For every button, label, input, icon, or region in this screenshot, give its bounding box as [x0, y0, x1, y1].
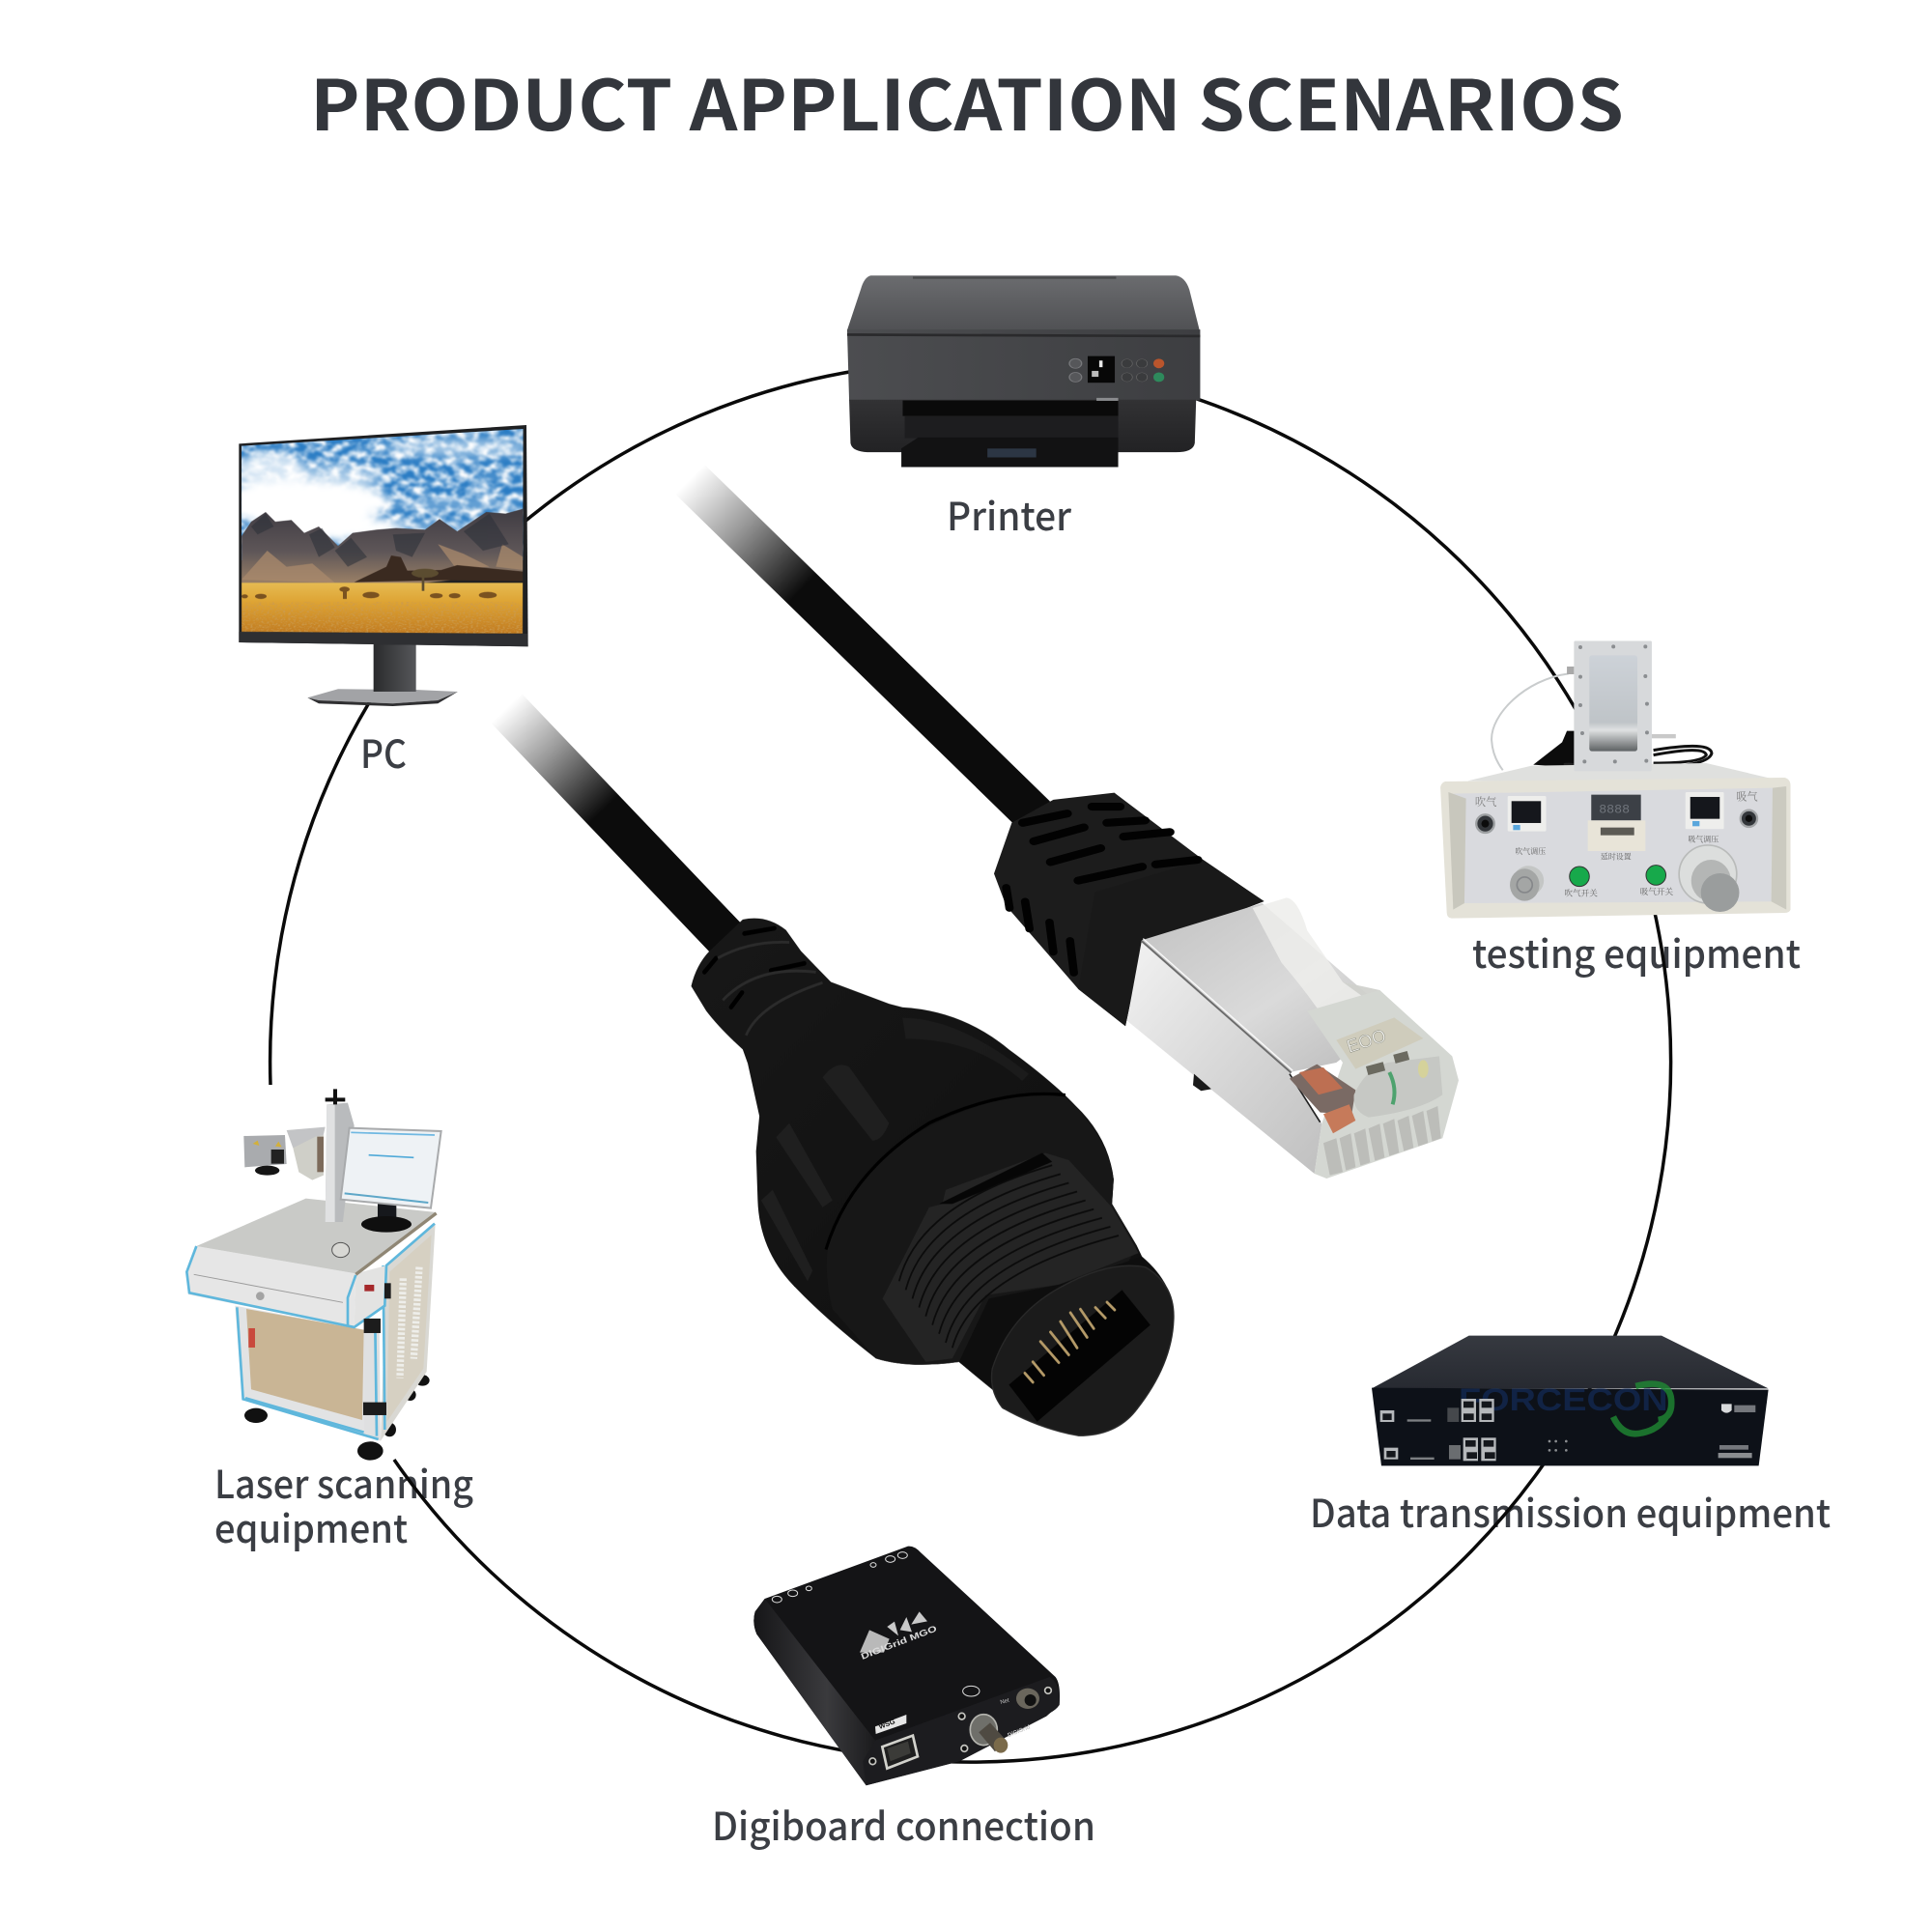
equipment top [1372, 1336, 1769, 1388]
control panel: 吹气开关 [1564, 887, 1598, 898]
socket body [691, 918, 1174, 1435]
socket thread [883, 1153, 1139, 1362]
label: Data transmission equipment: Data transmission equipment [1310, 1483, 1831, 1539]
equipment ports [1380, 1399, 1568, 1461]
contact teeth [1323, 1106, 1441, 1176]
control panel: 延时设置 [1601, 851, 1632, 862]
equipment front [1372, 1388, 1769, 1465]
digiboard logo: DIGIGrid MGO [860, 1624, 938, 1662]
machine monitor [341, 1128, 441, 1233]
icon: laser scanning machine [186, 1089, 441, 1461]
icon: PC monitor [210, 425, 531, 706]
printer tray [901, 438, 1119, 467]
icon: testing equipment [1440, 640, 1791, 919]
label: PC: PC [360, 724, 407, 780]
socket face ring [991, 1265, 1174, 1435]
crystal tab [1253, 897, 1379, 1024]
Net label: Net [1000, 1698, 1010, 1706]
crystal body [1307, 990, 1459, 1179]
sensor cables [1492, 673, 1712, 770]
monitor frame [239, 425, 528, 646]
icon: digiboard connection [753, 1547, 1060, 1785]
RJ45 panel-mount socket [691, 918, 1174, 1435]
laser head [243, 1135, 287, 1176]
colored wires [1290, 1065, 1355, 1114]
printer lid [847, 275, 1200, 330]
digiboard logo [860, 1611, 938, 1662]
printer paper slot [902, 401, 1119, 416]
sensor chamber [1567, 640, 1652, 771]
connecting ring [270, 361, 1671, 1762]
plug boot [994, 793, 1264, 1026]
label: testing equipment: testing equipment [1472, 923, 1801, 980]
top icons [772, 1552, 907, 1603]
cabinet blue trim [237, 1265, 384, 1439]
socket collar ring [827, 1095, 1137, 1425]
control panel: 吹气调压 [1515, 846, 1546, 857]
control panel: 吸气开关 [1640, 886, 1673, 897]
screws [869, 1688, 1051, 1765]
socket gold contacts [1025, 1302, 1115, 1382]
machine feet [244, 1375, 430, 1461]
watermark [1459, 1382, 1671, 1434]
socket inner tube [959, 1257, 1174, 1425]
monitor stand [374, 643, 416, 692]
plug metal shield and crystal head [1127, 897, 1459, 1179]
digiboard casing [753, 1547, 1060, 1785]
cabinet side [381, 1224, 436, 1441]
monitor base [307, 689, 458, 706]
upper cable [690, 479, 1036, 816]
plug metal shield and crystal head: EOO [1344, 1025, 1388, 1057]
digiboard left rounded edge [753, 1599, 875, 1785]
laser column and arm [287, 1089, 355, 1222]
printer lower body [849, 400, 1196, 452]
monitor screen: landscape [242, 429, 524, 634]
cabinet front [235, 1306, 380, 1439]
icon: printer [847, 275, 1200, 467]
printer upper body [847, 329, 1200, 401]
BNC connector [970, 1715, 1008, 1753]
table top [196, 1199, 437, 1273]
title: PRODUCT APPLICATION SCENARIOS [310, 49, 1624, 151]
watermark: FORCECON [1459, 1382, 1668, 1417]
label: Digiboard connection: Digiboard connection [712, 1796, 1095, 1852]
main box front [1440, 778, 1791, 919]
label: Printer: Printer [947, 486, 1072, 542]
control panel: 吸气调压 [1688, 835, 1719, 845]
lower cable [506, 708, 729, 942]
label: Laser scanning equipment [214, 1454, 473, 1554]
digiboard front face [863, 1677, 1060, 1785]
WSG tag [875, 1715, 906, 1734]
RJ45 port [882, 1736, 918, 1769]
control panel: 8888 [1599, 803, 1630, 817]
control panel: 吸气 [1736, 789, 1758, 805]
socket grip ridges [761, 1018, 1029, 1281]
main box top [1467, 763, 1788, 782]
WSG tag: WSG [877, 1717, 896, 1731]
socket strain-relief ribs [704, 928, 805, 1008]
power jack [1016, 1689, 1039, 1709]
table drawer front [186, 1246, 355, 1328]
clock symbol [963, 1686, 980, 1696]
brand logo [1719, 1404, 1755, 1458]
RJ45 plug [994, 793, 1459, 1179]
printer control panel [1069, 356, 1164, 401]
label: Laser scanning equipment: Laser scanning [214, 1454, 473, 1510]
control panel: 吹气 [1475, 794, 1496, 810]
logo on front: DiGiGrid [1007, 1724, 1032, 1739]
cabinet vents [400, 1267, 419, 1378]
socket opening [1009, 1290, 1151, 1422]
label: Laser scanning equipment: equipment [214, 1498, 408, 1554]
control panel [1448, 786, 1786, 912]
icon: data transmission equipment [1372, 1336, 1769, 1465]
